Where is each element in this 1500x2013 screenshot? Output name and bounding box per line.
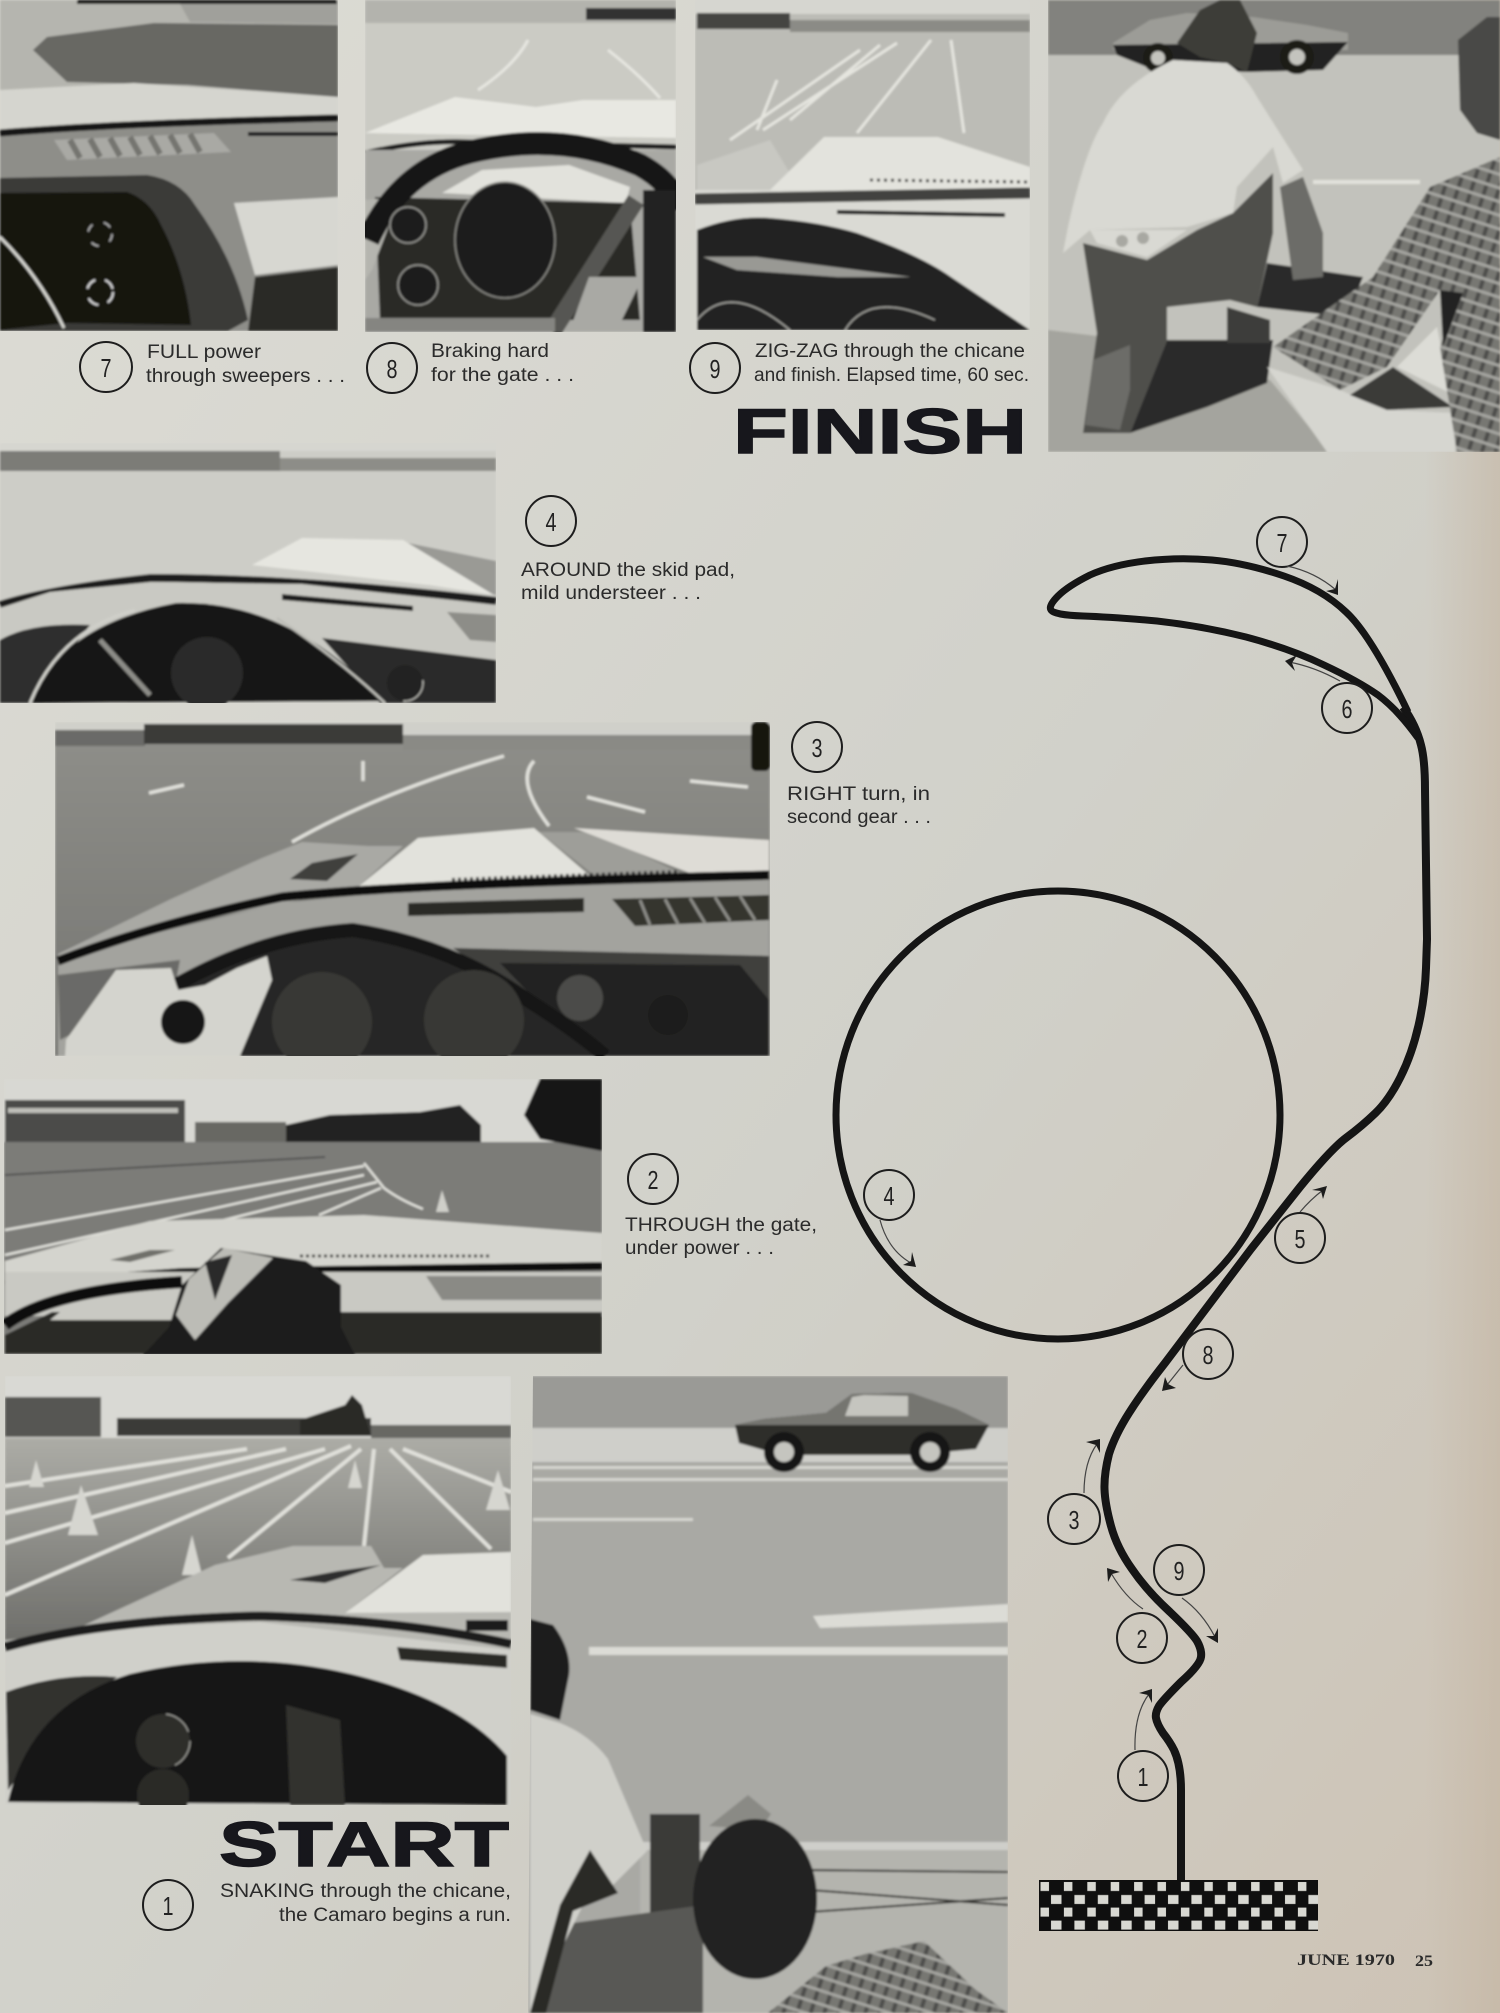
caption 1: the Camaro begins a run. [279, 1905, 511, 1926]
track: skid pad circle [836, 891, 1280, 1339]
heading: finish: FINISH [733, 397, 1027, 467]
caption 4: AROUND the skid pad, [521, 560, 735, 581]
caption 4: 4 [546, 507, 556, 537]
marker 1 [1118, 1689, 1168, 1801]
caption 8: 8 [386, 354, 398, 384]
marker 2: 2 [1136, 1624, 1148, 1654]
caption 2 [625, 1154, 817, 1259]
photo 2: through the gate [4, 1079, 603, 1355]
caption 1: 1 [162, 1891, 174, 1921]
marker 6: 6 [1342, 694, 1352, 724]
marker 8: 8 [1202, 1340, 1214, 1370]
marker 9 [1154, 1545, 1218, 1643]
heading: start: START [219, 1810, 509, 1880]
caption 7 [80, 342, 345, 392]
caption 8: for the gate . . . [431, 365, 574, 386]
photo 1: snaking through the chicane [5, 1376, 511, 1821]
caption 4 [521, 496, 735, 604]
caption 9: 9 [710, 354, 720, 384]
marker 9: 9 [1174, 1556, 1184, 1586]
folio: date and page number: JUNE 1970 [1297, 1952, 1395, 1969]
caption 7: 7 [100, 353, 112, 383]
photo 7: sweepers from the cockpit [0, 0, 338, 331]
caption 3 [787, 722, 931, 828]
caption 9: ZIG-ZAG through the chicane [755, 341, 1025, 362]
marker 2 [1107, 1568, 1167, 1663]
folio: date and page number [1297, 1952, 1433, 1970]
track: sweeper loop [1050, 559, 1418, 738]
photo: Camaro on the course with timers in the foreground [528, 1376, 1008, 2013]
marker 1: 1 [1138, 1762, 1148, 1792]
marker 7: 7 [1276, 528, 1288, 558]
caption 9 [690, 341, 1029, 393]
course map [836, 517, 1427, 1931]
marker 6 [1285, 655, 1372, 733]
caption 3: 3 [812, 733, 822, 763]
caption 8: Braking hard [431, 341, 549, 362]
caption 2: 2 [648, 1165, 658, 1195]
track: main route from start line [1104, 707, 1427, 1880]
marker 5: 5 [1294, 1224, 1306, 1254]
caption 3: RIGHT turn, in [787, 784, 930, 805]
marker 7 [1257, 517, 1338, 595]
marker 4: 4 [884, 1181, 894, 1211]
caption 9: and finish. Elapsed time, 60 sec. [754, 365, 1029, 386]
photo 9: chicane and finish [695, 0, 1030, 330]
photo: officials at the timing gear with the car behind [1048, 0, 1500, 452]
marker 3 [1048, 1439, 1100, 1544]
caption 7: through sweepers . . . [146, 366, 345, 387]
marker 8 [1162, 1329, 1233, 1391]
marker 3: 3 [1068, 1505, 1080, 1535]
marker 5 [1275, 1186, 1327, 1263]
caption 8 [367, 341, 574, 393]
caption 3: second gear . . . [787, 807, 931, 828]
photo 3: right turn in second gear [55, 722, 770, 1072]
caption 2: THROUGH the gate, [625, 1215, 817, 1236]
caption 2: under power . . . [625, 1238, 774, 1259]
folio: date and page number: 25 [1415, 1953, 1433, 1970]
caption 7: FULL power [147, 342, 262, 363]
caption 1: SNAKING through the chicane, [220, 1881, 511, 1902]
photo 8: braking hard [365, 0, 676, 332]
caption 4: mild understeer . . . [521, 583, 701, 604]
start/finish checkered bar [1039, 1880, 1318, 1931]
photo 4: around the skid pad [0, 443, 496, 709]
caption 1 [143, 1880, 511, 1930]
marker 4 [864, 1170, 916, 1267]
